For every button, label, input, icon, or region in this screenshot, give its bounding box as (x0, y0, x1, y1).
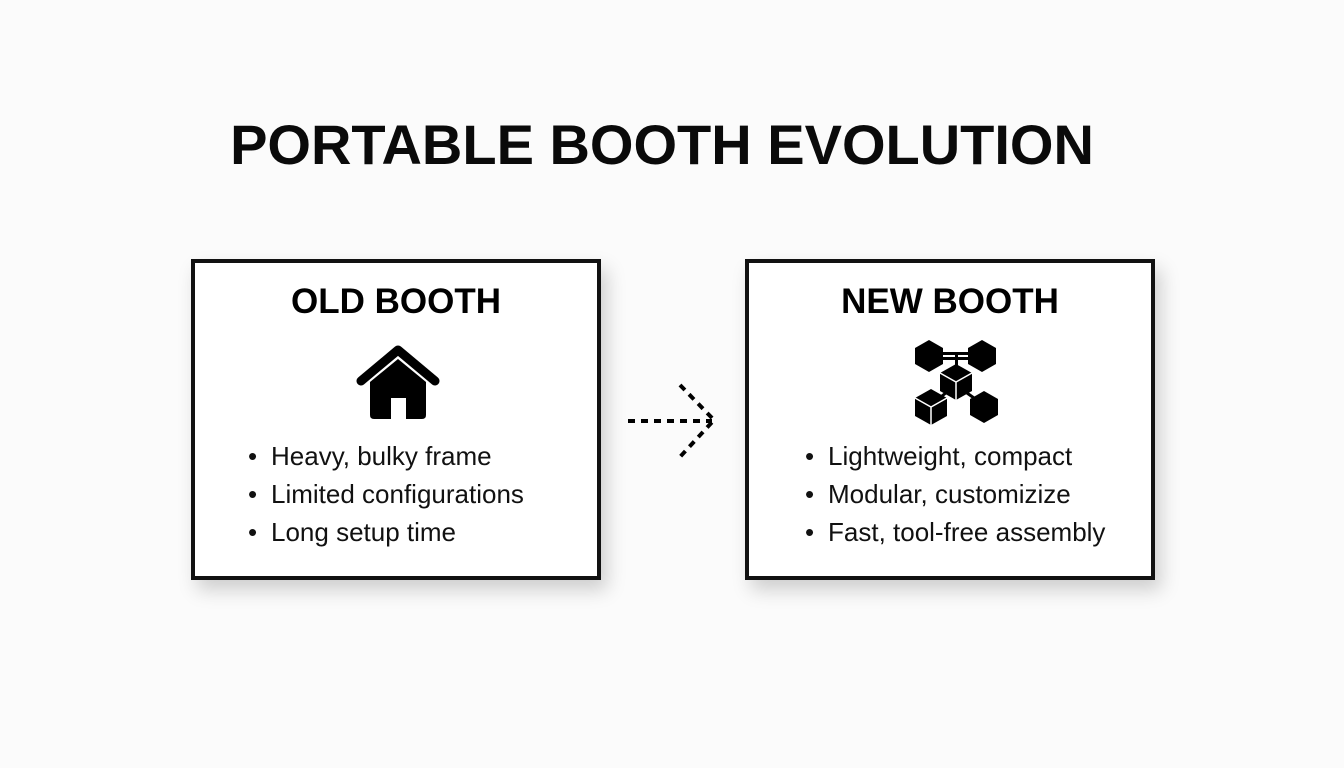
list: old booth features (249, 441, 524, 547)
heading: new booth: NEW BOOTH (841, 282, 1059, 321)
panel: old booth (191, 259, 601, 580)
arrow (628, 384, 714, 458)
title: PORTABLE BOOTH EVOLUTION (230, 113, 1094, 176)
icon: house (356, 346, 440, 419)
icon: modular cubes (915, 340, 998, 425)
list: old booth features: Heavy, bulky frame (271, 441, 492, 471)
heading: old booth: OLD BOOTH (291, 282, 501, 321)
list: new booth features: Fast, tool-free assembly (828, 517, 1105, 547)
list: new booth features: Lightweight, compact (828, 441, 1072, 471)
list: old booth features: Long setup time (271, 517, 456, 547)
list: old booth features: Limited configurations (271, 479, 524, 509)
panel: new booth (745, 259, 1155, 580)
list: new booth features: Modular, customizize (828, 479, 1071, 509)
list: new booth features (806, 441, 1106, 547)
